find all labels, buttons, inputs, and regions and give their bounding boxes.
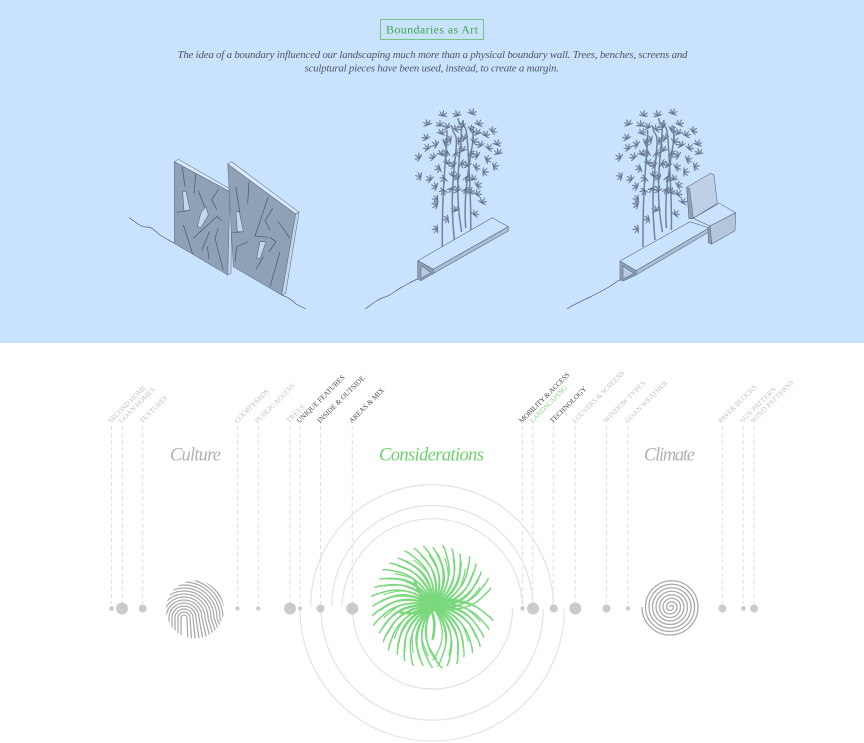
wall one — [174, 159, 232, 275]
rotated labels: SECOND HOME — [107, 383, 148, 425]
rotated labels: TEXTURES — [138, 394, 169, 425]
rotated labels: SUN PATTERN — [739, 385, 779, 425]
rotated labels: GOAN HOMES — [118, 386, 157, 425]
rotated labels: WINDOW TYPES — [602, 379, 647, 425]
heading: considerations: Considerations — [379, 446, 484, 466]
rotated labels: COURTYARDS — [233, 387, 271, 425]
panel: boundaries as art — [0, 0, 864, 343]
title: Boundaries as Art — [386, 22, 479, 36]
rotated labels — [107, 369, 796, 425]
rotated labels: UNIQUE FEATURES — [295, 374, 347, 425]
wall two — [228, 162, 299, 295]
heading: climate: Climate — [644, 446, 695, 466]
illustration: sculptural walls — [129, 159, 306, 309]
rotated labels: LANDSCAPING — [528, 384, 569, 425]
illustration: bamboo, bench and seat — [567, 107, 736, 309]
heading: culture: Culture — [170, 446, 221, 466]
rotated labels: TREES — [285, 403, 307, 425]
rotated labels: PAVER BLOCKS — [717, 383, 759, 425]
rotated labels: TECHNOLOGY — [549, 384, 589, 425]
title — [380, 20, 484, 40]
rotated labels: GOAN WEATHER — [624, 379, 670, 425]
rotated labels: AREAS & MIX — [348, 386, 387, 425]
rotated labels: PUBLIC ACCESS — [254, 382, 296, 425]
dashed connector lines — [112, 426, 754, 604]
illustration: bamboo and bench — [365, 107, 508, 309]
intro text: sculptural pieces have been used, instead, to create a margin. — [304, 62, 559, 74]
bench — [418, 218, 508, 281]
concentric arcs — [300, 485, 564, 741]
rotated labels: WIND PATTERNS — [749, 379, 796, 425]
icon: green swirl — [371, 545, 494, 668]
intro text: The idea of a boundary influenced our landscaping much more than a physical boundary wall. Trees, benches, screens and — [178, 49, 688, 61]
icon: fingerprint — [166, 580, 224, 638]
rotated labels: INSIDE & OUTSIDE — [316, 374, 367, 425]
intro text — [178, 49, 688, 74]
rotated labels: LOUVERS & SCREENS — [571, 369, 627, 425]
icon: tree rings spiral — [642, 581, 698, 635]
bench and backrest — [620, 173, 736, 281]
rotated labels: MOBILITY & ACCESS — [518, 371, 572, 425]
timeline dots — [109, 602, 758, 614]
